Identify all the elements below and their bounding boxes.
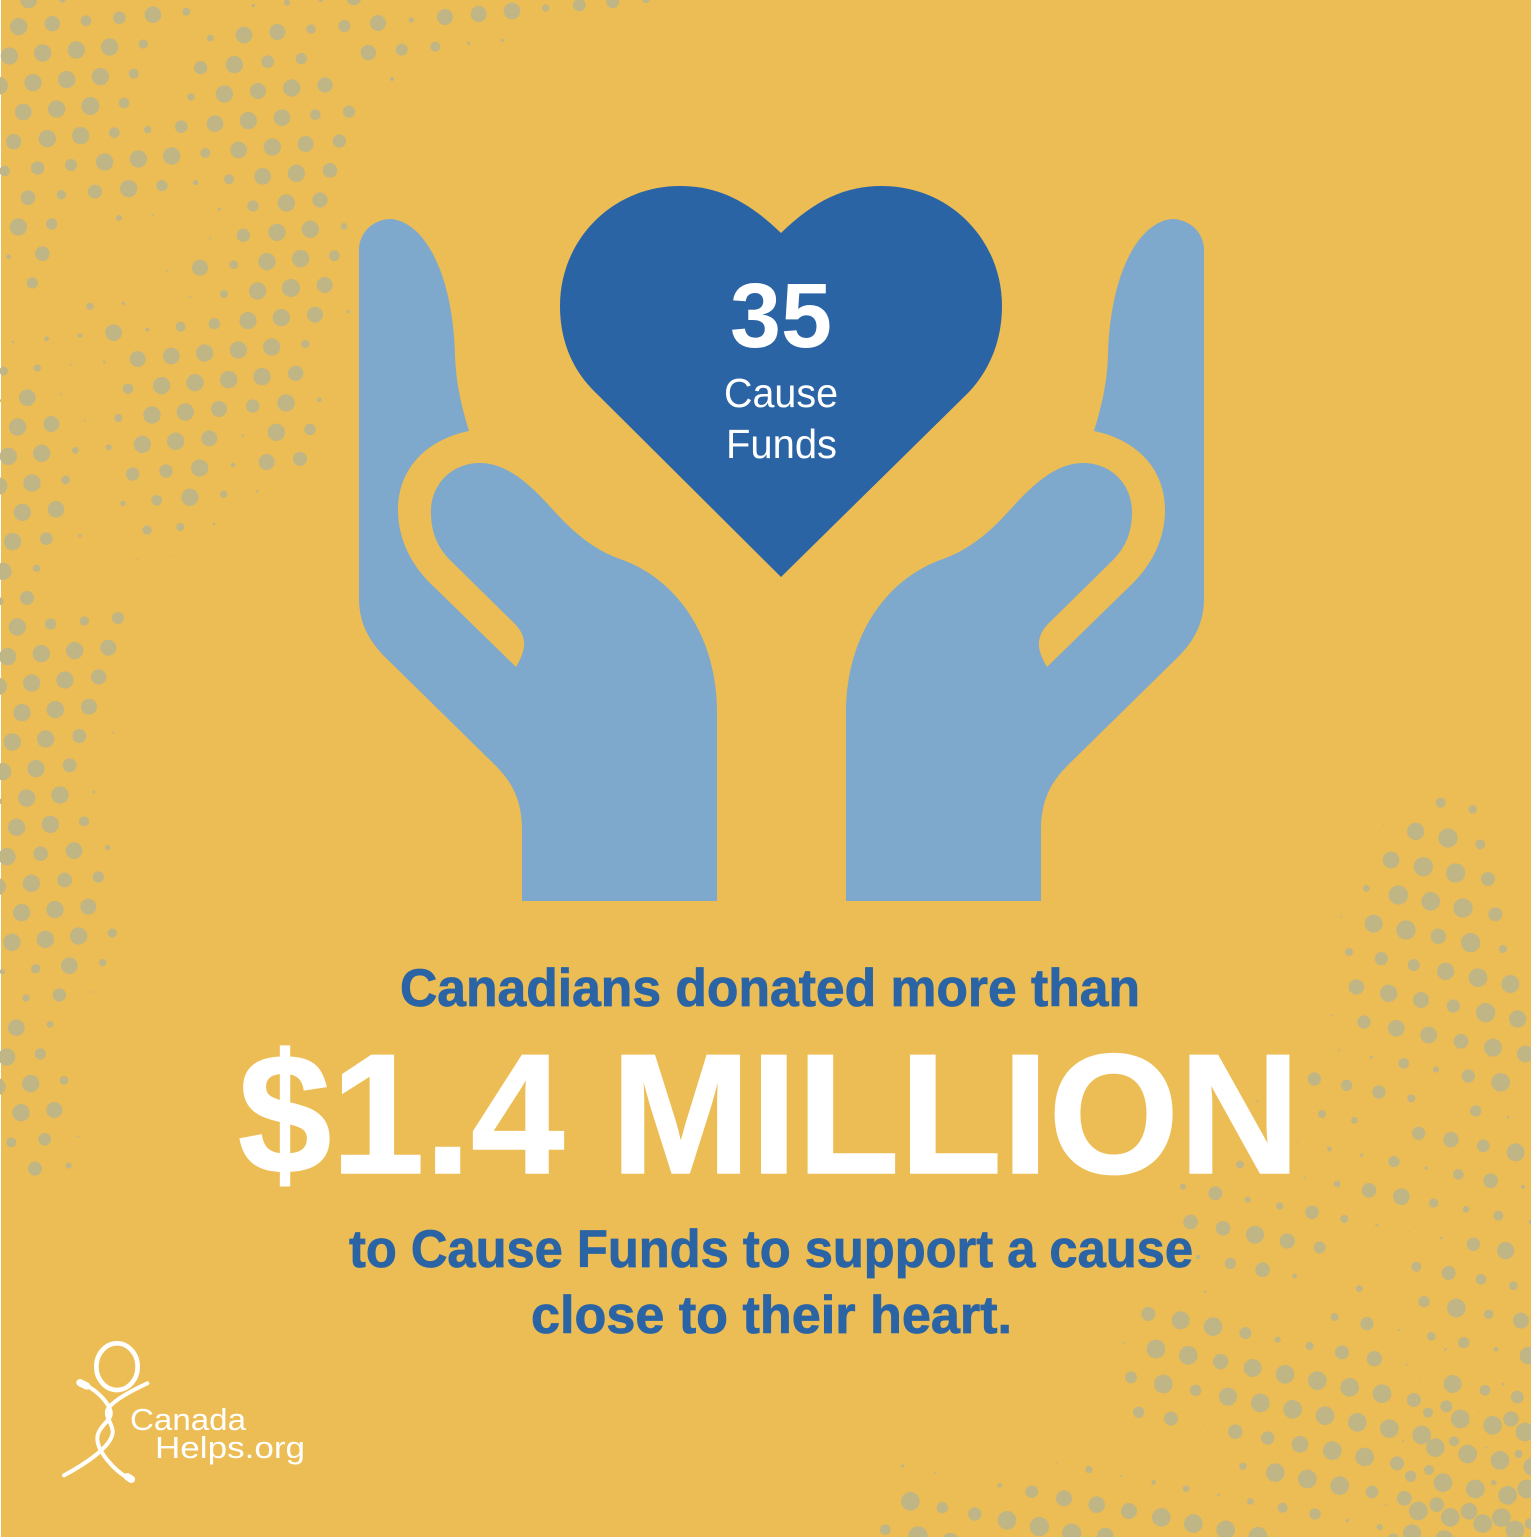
logo: CanadaHelps.org [64, 1343, 305, 1479]
heart stat: 35 Cause Funds [724, 265, 838, 467]
heart stat: 35 Cause Funds: Funds [726, 421, 837, 467]
icon: right hand [846, 219, 1204, 901]
icon: heart [560, 186, 1002, 577]
heart stat: 35 Cause Funds: Cause [724, 370, 838, 416]
intro text: Canadians donated more than [400, 959, 1140, 1018]
dot pattern: bottom right [877, 1296, 1531, 1537]
closing text [349, 1220, 1193, 1345]
dot pattern: upper left middle [0, 302, 350, 580]
heart stat: 35 Cause Funds: 35 [730, 265, 832, 367]
dot pattern: top left [0, 0, 650, 300]
logo: CanadaHelps.org: Helps.org [155, 1430, 305, 1465]
dot pattern: left edge [0, 591, 124, 1176]
closing text: to Cause Funds to support a cause [349, 1220, 1193, 1279]
dot pattern: lower right middle [1180, 1080, 1531, 1299]
closing text: close to their heart. [531, 1286, 1012, 1345]
logo: CanadaHelps.org: Canada [130, 1402, 247, 1437]
icon: left hand [359, 219, 717, 901]
dot pattern: right edge [1308, 798, 1531, 1092]
headline amount: $1.4 MILLION [238, 1019, 1300, 1210]
